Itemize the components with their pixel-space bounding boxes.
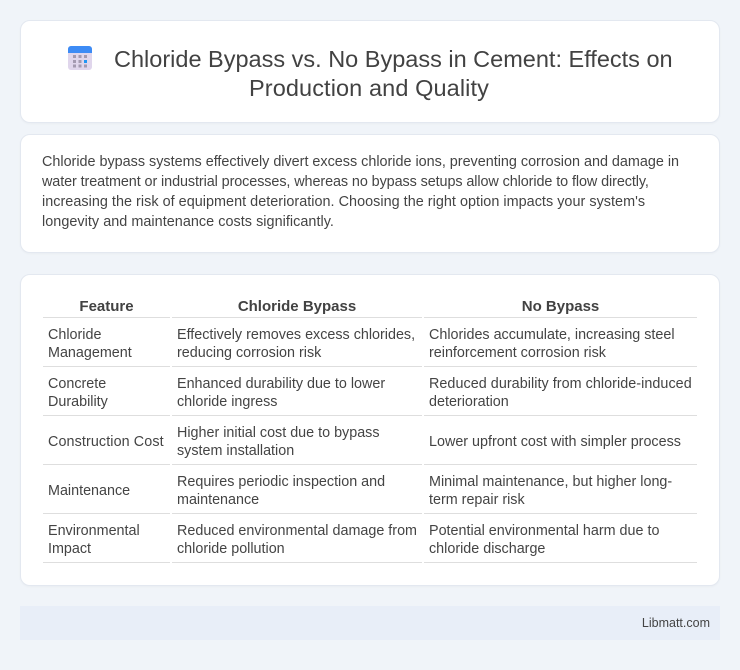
- footer bar: [20, 606, 720, 640]
- cell: Chlorides accumulate, increasing steel: [429, 327, 675, 343]
- cell: Effectively removes excess chlorides,: [177, 327, 415, 343]
- cell: [429, 474, 672, 508]
- cell: deterioration: [429, 394, 509, 410]
- row: Concrete Durability: Concrete: [48, 376, 106, 392]
- title: Chloride Bypass vs. No Bypass in Cement: Effects on: [114, 46, 673, 72]
- cell: Higher initial cost due to bypass: [177, 425, 380, 441]
- title: [114, 46, 673, 101]
- cell: maintenance: [177, 492, 259, 508]
- cell: [177, 523, 417, 557]
- intro text: longevity and maintenance costs significantly.: [42, 214, 334, 230]
- cell: reinforcement corrosion risk: [429, 345, 606, 361]
- footer text: Libmatt.com: [642, 616, 710, 630]
- row: Concrete Durability: [48, 376, 108, 410]
- cell: [177, 327, 415, 361]
- cell: Potential environmental harm due to: [429, 523, 659, 539]
- cell: reducing corrosion risk: [177, 345, 321, 361]
- cell: term repair risk: [429, 492, 525, 508]
- panel: title header: [20, 20, 720, 123]
- panel: comparison table: [20, 274, 720, 586]
- cell: Lower upfront cost with simpler process: [429, 434, 681, 450]
- cell: [429, 523, 659, 557]
- row: Chloride Management: Chloride: [48, 327, 101, 343]
- row: Maintenance: Maintenance: [48, 483, 130, 499]
- cell: chloride pollution: [177, 541, 285, 557]
- cell: [177, 425, 380, 459]
- title: Production and Quality: [249, 75, 489, 101]
- cell: chloride ingress: [177, 394, 277, 410]
- table header: No Bypass: No Bypass: [522, 298, 599, 315]
- cell: Reduced environmental damage from: [177, 523, 417, 539]
- cell: Minimal maintenance, but higher long-: [429, 474, 672, 490]
- cell: chloride discharge: [429, 541, 545, 557]
- cell: [429, 327, 675, 361]
- intro text: increasing the risk of equipment deterioration. Choosing the right option impacts your system's: [42, 194, 645, 210]
- row: Concrete Durability: Durability: [48, 394, 108, 410]
- cell: [177, 474, 385, 508]
- cell: Requires periodic inspection and: [177, 474, 385, 490]
- table header: Chloride Bypass: Chloride Bypass: [238, 298, 356, 315]
- cell: Reduced durability from chloride-induced: [429, 376, 692, 392]
- panel: intro: [20, 134, 720, 253]
- cell: [429, 376, 692, 410]
- intro text: Chloride bypass systems effectively divert excess chloride ions, preventing corrosion and damage in: [42, 154, 679, 170]
- row: Environmental Impact: Environmental: [48, 523, 140, 539]
- row: Chloride Management: Management: [48, 345, 132, 361]
- intro text: water treatment or industrial processes, whereas no bypass setups allow chloride to flow directly,: [42, 174, 649, 190]
- cell: Enhanced durability due to lower: [177, 376, 385, 392]
- cell: [177, 376, 385, 410]
- intro text: [42, 154, 679, 230]
- row: Chloride Management: [48, 327, 132, 361]
- icon: calendar: [68, 46, 92, 70]
- cell: system installation: [177, 443, 294, 459]
- row: Environmental Impact: [48, 523, 140, 557]
- row: Construction Cost: Construction Cost: [48, 434, 164, 450]
- table header: Feature: Feature: [79, 298, 134, 315]
- row: Environmental Impact: Impact: [48, 541, 91, 557]
